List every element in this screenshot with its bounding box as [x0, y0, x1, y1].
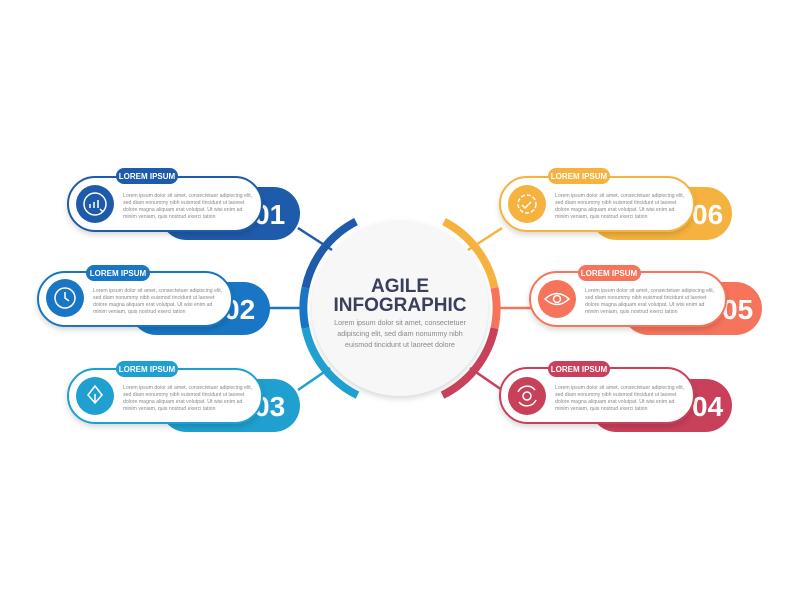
card 02: dolore magna aliquam erat volutpat. Ut wisi enim ad	[93, 302, 212, 308]
card 04: dolore magna aliquam erat volutpat. Ut wisi enim ad	[555, 399, 674, 405]
card 03: dolore magna aliquam erat volutpat. Ut wisi enim ad	[123, 399, 242, 405]
card 06	[500, 168, 732, 240]
card 02: LOREM IPSUM	[90, 269, 147, 278]
card 03	[68, 361, 300, 432]
card 01	[68, 168, 300, 240]
card 02: 02	[224, 294, 255, 325]
card 02	[38, 265, 270, 335]
central circle: INFOGRAPHIC	[334, 295, 467, 316]
title: AGILE	[371, 276, 429, 297]
card 05	[530, 265, 762, 335]
card 04: sed diam nonummy nibh euismod tincidunt ut laoreet	[555, 392, 677, 398]
card 06: minim veniam, quis nostrud exerci tation	[555, 214, 648, 220]
card 01: sed diam nonummy nibh euismod tincidunt ut laoreet	[123, 200, 245, 206]
card 06: Lorem ipsum dolor sit amet, consectetuer adipiscing elit,	[555, 193, 684, 199]
card 01: Lorem ipsum dolor sit amet, consectetuer adipiscing elit,	[123, 193, 252, 199]
card 05: minim veniam, quis nostrud exerci tation	[585, 309, 678, 315]
ring arcs	[303, 222, 497, 395]
card 01: 01	[254, 199, 285, 230]
card 05: sed diam nonummy nibh euismod tincidunt ut laoreet	[585, 295, 707, 301]
card 01: dolore magna aliquam erat volutpat. Ut wisi enim ad	[123, 207, 242, 213]
card 02: minim veniam, quis nostrud exerci tation	[93, 309, 186, 315]
card 04: minim veniam, quis nostrud exerci tation	[555, 406, 648, 412]
center text: adipiscing elit, sed diam nonummy nibh	[337, 329, 463, 338]
card 05: dolore magna aliquam erat volutpat. Ut wisi enim ad	[585, 302, 704, 308]
connectors	[268, 228, 532, 390]
card 05: Lorem ipsum dolor sit amet, consectetuer adipiscing elit,	[585, 288, 714, 294]
central circle	[303, 220, 497, 396]
card 06: sed diam nonummy nibh euismod tincidunt ut laoreet	[555, 200, 677, 206]
card 04	[500, 361, 732, 432]
center text: Lorem ipsum dolor sit amet, consectetuer	[334, 318, 467, 327]
card 03: minim veniam, quis nostrud exerci tation	[123, 406, 216, 412]
card 02: Lorem ipsum dolor sit amet, consectetuer adipiscing elit,	[93, 288, 222, 294]
card 06: LOREM IPSUM	[551, 172, 608, 181]
card 01: LOREM IPSUM	[119, 172, 176, 181]
center text: euismod tincidunt ut laoreet dolore	[345, 340, 455, 349]
card 04: 04	[692, 391, 724, 422]
card 05: LOREM IPSUM	[581, 269, 638, 278]
card 05: 05	[722, 294, 753, 325]
card 04: LOREM IPSUM	[551, 365, 608, 374]
card 03: LOREM IPSUM	[119, 365, 176, 374]
card 03: Lorem ipsum dolor sit amet, consectetuer adipiscing elit,	[123, 385, 252, 391]
card 01: minim veniam, quis nostrud exerci tation	[123, 214, 216, 220]
card 06: 06	[692, 199, 723, 230]
card 06: dolore magna aliquam erat volutpat. Ut wisi enim ad	[555, 207, 674, 213]
card 03: sed diam nonummy nibh euismod tincidunt ut laoreet	[123, 392, 245, 398]
card 03: 03	[254, 391, 285, 422]
card 02: sed diam nonummy nibh euismod tincidunt ut laoreet	[93, 295, 215, 301]
center text	[334, 318, 467, 349]
card 04: Lorem ipsum dolor sit amet, consectetuer adipiscing elit,	[555, 385, 684, 391]
